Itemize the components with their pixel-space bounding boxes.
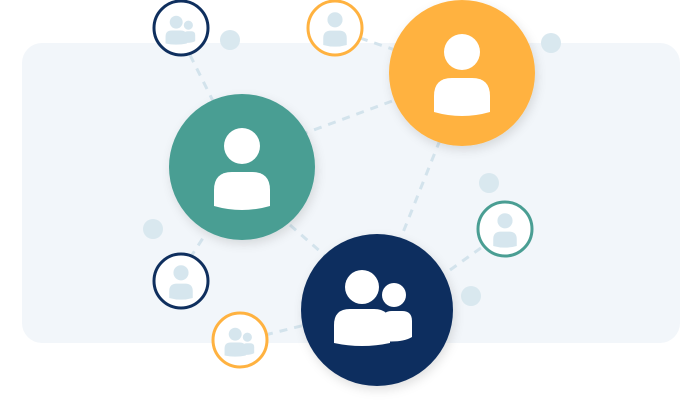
background panel <box>22 43 680 343</box>
small node: teal person right <box>478 202 532 256</box>
connector lines <box>190 38 485 335</box>
light dots <box>143 30 561 306</box>
node: orange person <box>389 0 535 146</box>
node: teal person <box>169 94 315 240</box>
small node: orange group bottom <box>213 313 267 367</box>
small node: navy group top <box>154 1 208 55</box>
small node: orange person top <box>308 1 362 55</box>
small node: navy person left <box>154 254 208 308</box>
node: navy group <box>301 234 453 386</box>
